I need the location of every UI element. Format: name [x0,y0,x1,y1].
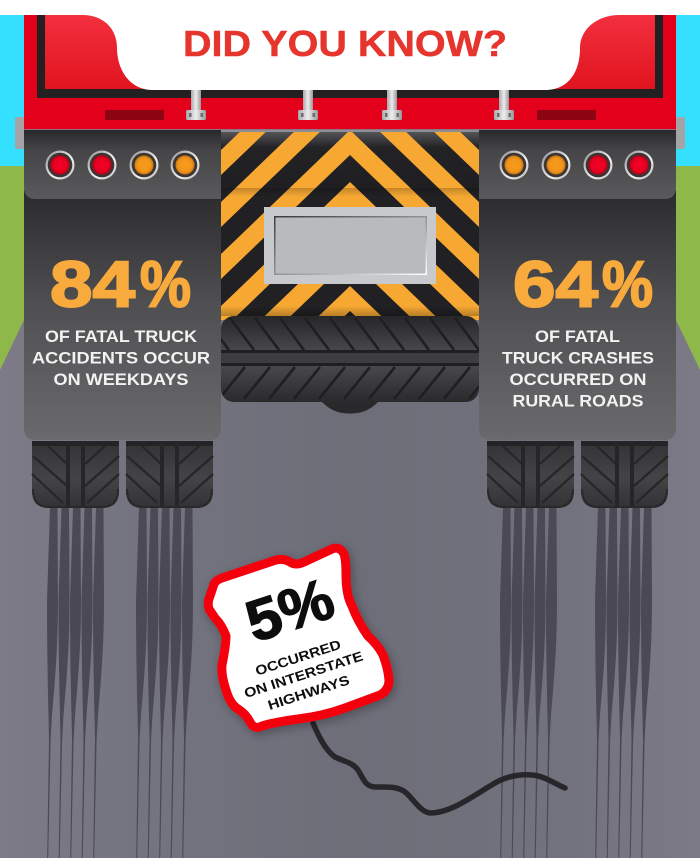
stat 84% [50,248,191,320]
license plate [264,207,436,284]
tag caption: HIGHWAYS [266,672,351,713]
right caption: RURAL ROADS [512,392,644,410]
right caption: OCCURRED ON [510,370,646,389]
stat 5%: 5% [238,566,342,655]
tail slot right [537,110,596,120]
tyres [32,441,668,508]
background: sky [0,15,700,167]
stat 64%: % [602,248,653,320]
left caption: ACCIDENTS OCCUR [32,348,210,368]
title: DID YOU KNOW? [183,23,507,64]
hazard panel [221,130,479,320]
stat 64%: 64 [513,248,598,320]
left caption [32,327,210,389]
right caption [502,327,654,410]
right caption: TRUCK CRASHES [502,348,654,368]
right caption: OF FATAL [535,327,620,346]
skid marks: left [47,508,193,858]
background: grass [0,166,700,372]
white top margin [0,0,700,15]
left caption: ON WEEKDAYS [54,370,188,389]
tag caption: ON INTERSTATE [242,648,365,701]
left light bar [24,130,221,199]
tyre bar [221,316,479,414]
wire [313,723,565,813]
callout: torn tag [208,548,389,727]
tag caption: OCCURRED [253,637,343,679]
tail slot left [105,110,164,120]
stat 84%: 84 [50,248,135,320]
left caption: OF FATAL TRUCK [45,327,198,346]
skid marks: right [500,508,652,858]
stat 84%: % [140,248,191,320]
right light bar [479,130,676,199]
stat 64% [513,248,653,320]
background: road [0,320,700,858]
bolts [186,90,514,120]
title sign [0,0,700,90]
tag caption [242,637,365,713]
truck body: red top [24,15,676,130]
panel: right mudflap [479,190,676,440]
truck side clamps [15,117,685,149]
differential hump [322,402,378,414]
panel: left mudflap [24,190,221,440]
